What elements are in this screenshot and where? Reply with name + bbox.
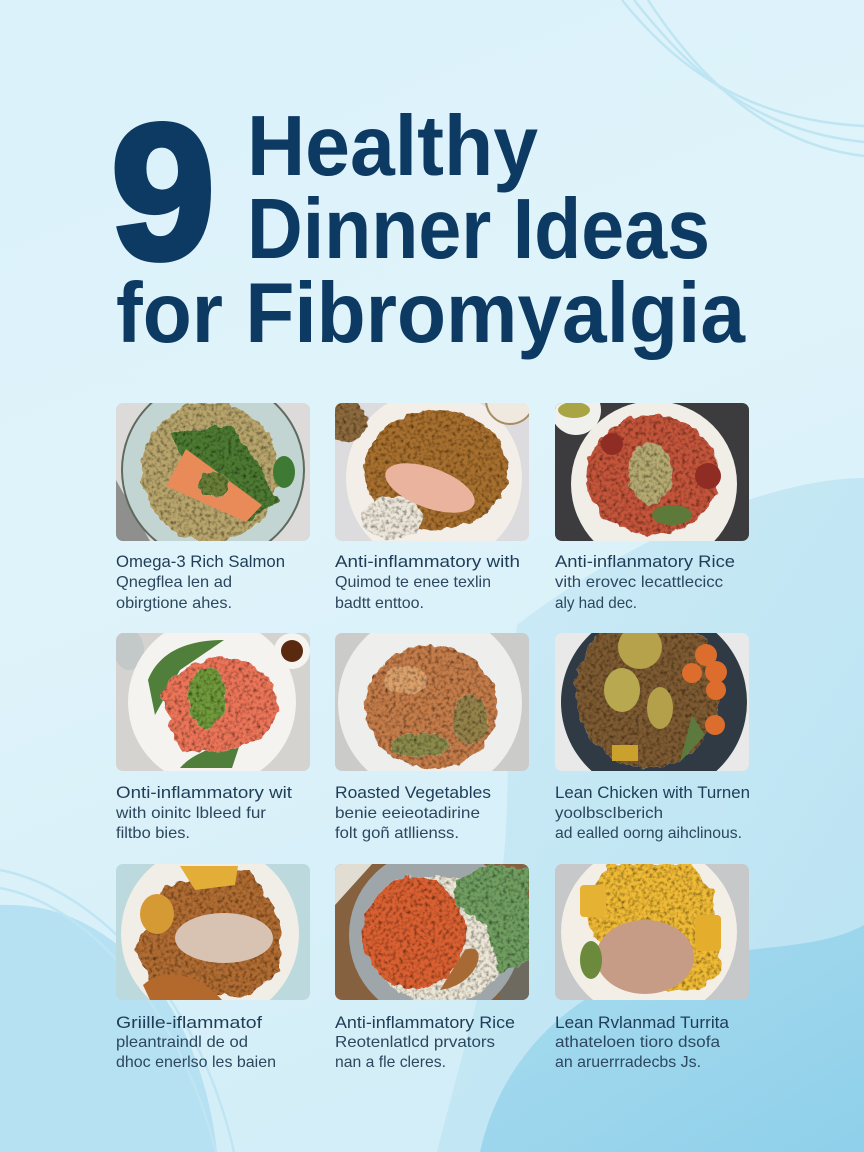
caption 4: with oinitc lbleed fur: [115, 805, 267, 822]
caption 8: Reotenlatlcd prvators: [335, 1034, 495, 1051]
photo: salmon on quinoa: [116, 403, 310, 541]
caption 2: Quimod te enee texlin: [335, 574, 491, 591]
caption 7: pleantraindl de od: [116, 1034, 248, 1051]
caption 4: Onti-inflammatory wit: [116, 783, 292, 802]
caption 3: [555, 552, 735, 612]
photo: dark bowl with carrots and lemon: [555, 633, 749, 771]
panel: card 1 salmon: [116, 403, 310, 612]
caption 6: [555, 783, 750, 842]
panel: card 8 anti-inflammatory rice: [335, 849, 529, 1071]
caption 5: [335, 783, 491, 842]
photo: glazed chicken with rice and mint: [335, 864, 529, 1000]
panel: card 9 lean turkey: [555, 864, 749, 1067]
caption 1: Omega-3 Rich Salmon: [116, 552, 285, 571]
title line: Healthy: Healthy: [247, 99, 538, 194]
photo: rice with tomato on dark table: [555, 403, 749, 541]
caption 3: Anti-inflanmatory Rice: [555, 552, 735, 571]
caption 3: aly had dec.: [555, 595, 637, 612]
caption 9: [555, 1013, 730, 1071]
panel: card 3 anti-inflammatory rice: [555, 403, 749, 612]
caption 2: badtt enttoo.: [335, 595, 424, 612]
big number 9: 9: [111, 84, 215, 299]
caption 9: athateloen tioro dsofa: [555, 1034, 720, 1051]
panel: card 5 roasted vegetables: [335, 611, 529, 842]
caption 4: [115, 783, 292, 842]
caption 1: Qnegflea len ad: [116, 574, 232, 591]
caption 6: yoolbscIberich: [555, 805, 663, 822]
title line: Dinner Ideas: Dinner Ideas: [247, 182, 710, 277]
panel: card 7 grilled chicken: [116, 864, 310, 1067]
caption 7: [116, 1013, 276, 1071]
caption 2: [335, 552, 520, 612]
caption 8: nan a fle cleres.: [335, 1054, 446, 1071]
caption 6: Lean Chicken with Turnen: [555, 783, 750, 802]
panel: card 2 anti-inflammatory quinoa: [335, 403, 529, 608]
caption 5: folt goñ atllienss.: [335, 825, 459, 842]
caption 1: [116, 552, 285, 612]
caption 5: benie eeieotadirine: [335, 805, 480, 822]
photo: bowl with salmon and grains: [335, 403, 529, 541]
caption 8: [335, 1013, 515, 1071]
title line: for Fibromyalgia: for Fibromyalgia: [116, 266, 746, 361]
caption 6: ad ealled oorng aihclinous.: [555, 825, 742, 842]
caption 7: dhoc enerlso les baien: [116, 1054, 276, 1071]
photo: roasted vegetable plate: [335, 633, 529, 771]
caption 5: Roasted Vegetables: [335, 783, 491, 802]
caption 7: Griille-iflammatof: [116, 1013, 262, 1032]
panel: card 4: [114, 618, 310, 842]
photo: sliced salmon with herbs: [116, 633, 310, 771]
caption 8: Anti-inflammatory Rice: [335, 1013, 515, 1032]
caption 1: obirgtione ahes.: [116, 595, 232, 612]
photo: lean meat with yellow potatoes: [555, 864, 749, 1000]
caption 4: filtbo bies.: [116, 825, 190, 842]
panel: card 6 lean chicken: [555, 633, 749, 842]
caption 2: Anti-inflammatory with: [335, 552, 520, 571]
caption 9: an aruerrradecbs Js.: [555, 1054, 701, 1071]
title: [111, 84, 746, 361]
caption 9: Lean Rvlanmad Turrita: [555, 1013, 730, 1032]
caption 3: vith erovec lecattlecicc: [555, 574, 723, 591]
photo: grilled chicken with potatoes: [116, 864, 310, 1000]
